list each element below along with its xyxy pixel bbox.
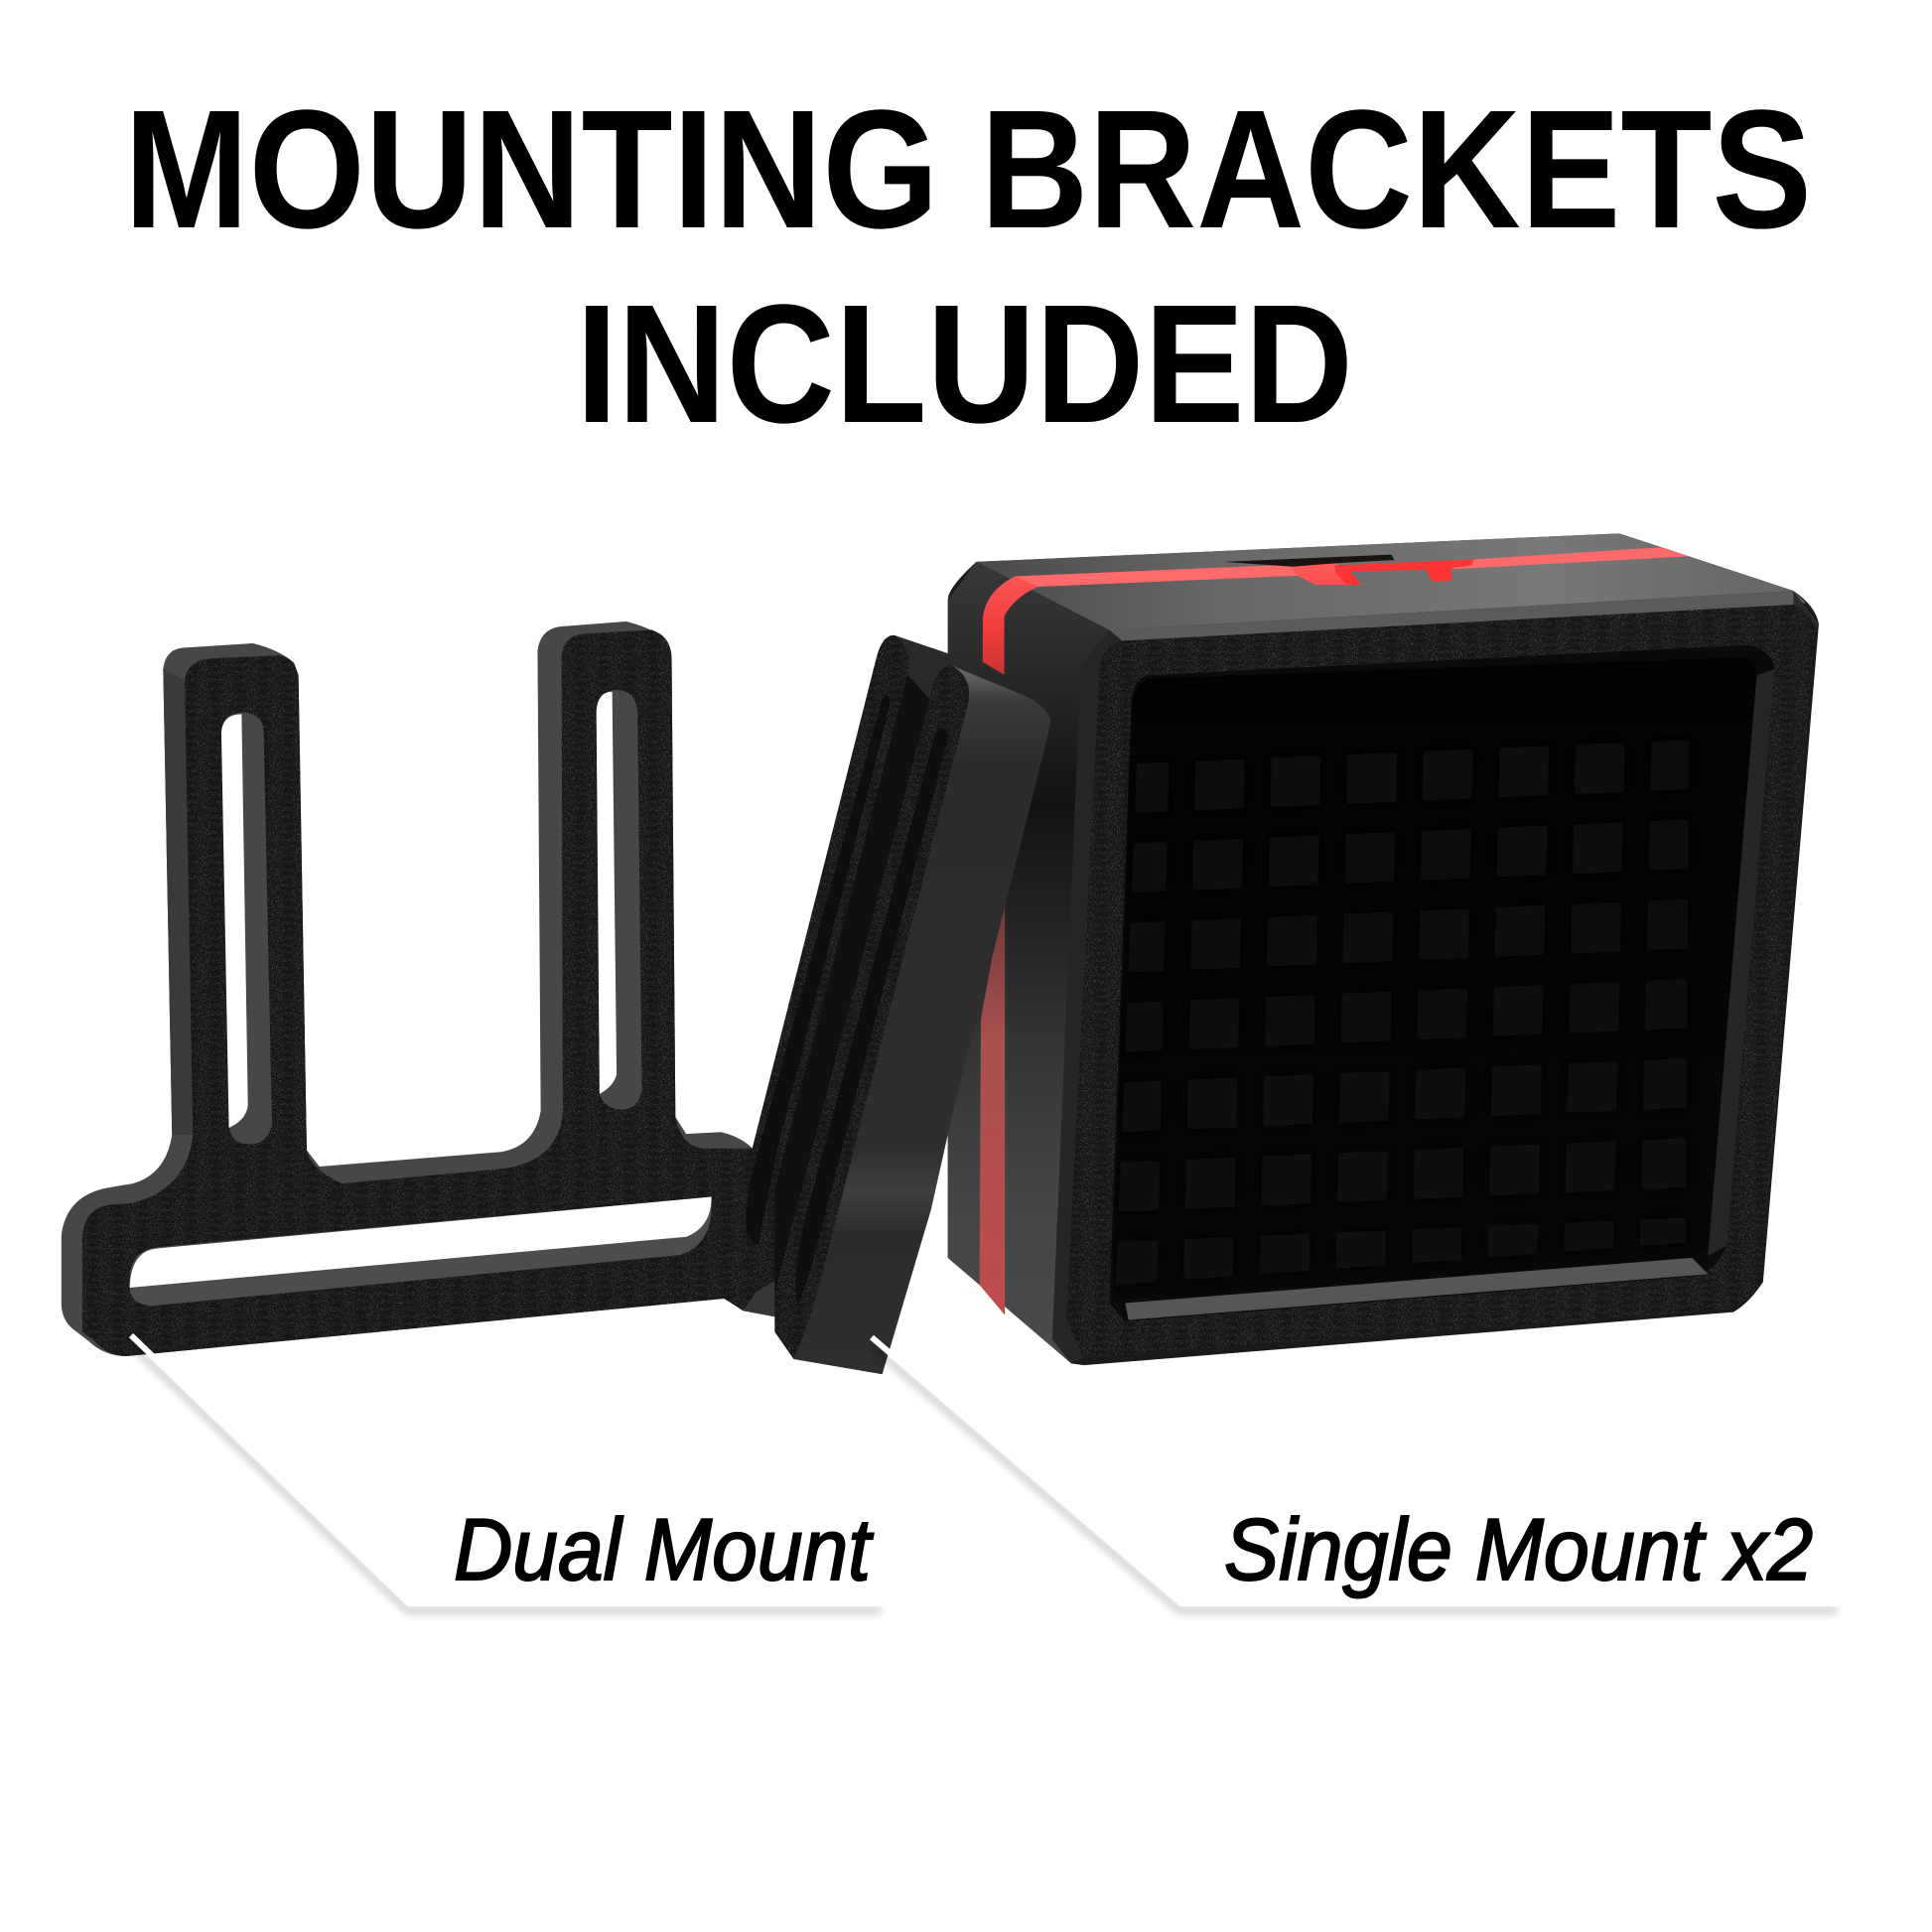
callout: Single Mount x2 bbox=[872, 1337, 1840, 1603]
leader line bbox=[872, 1337, 1840, 1603]
bracket front face bbox=[82, 630, 753, 1356]
slot 3 wall bbox=[130, 1197, 712, 1306]
product: cube light housing bbox=[948, 533, 1819, 1365]
front plate face bbox=[774, 666, 969, 1359]
slot 2 opening bbox=[597, 692, 617, 1094]
rear plate slot bbox=[746, 695, 891, 1244]
recess right wall bbox=[1708, 669, 1774, 1256]
top bevel bbox=[1109, 591, 1806, 641]
rear plate gap bbox=[774, 675, 929, 1293]
label: Dual Mount bbox=[454, 1500, 874, 1598]
recess bottom wall bbox=[1125, 1258, 1708, 1320]
slot 2 wall bbox=[597, 690, 642, 1110]
slot 3 opening bbox=[130, 1197, 712, 1288]
leader line bbox=[131, 1335, 884, 1603]
recess wall bbox=[1109, 645, 1774, 1321]
housing silhouette bbox=[948, 533, 1819, 1365]
title bbox=[124, 75, 1812, 459]
raised red clip bbox=[1335, 559, 1473, 585]
rear plate extrusion bbox=[743, 635, 987, 1322]
LED grid bbox=[1116, 718, 1689, 1285]
left bevel bbox=[1052, 630, 1122, 1363]
dual mount bracket bbox=[62, 621, 1051, 1374]
callout: Dual Mount bbox=[131, 1335, 884, 1603]
front plate slot bbox=[795, 728, 949, 1305]
title line 2: INCLUDED bbox=[576, 270, 1353, 459]
top slot bbox=[1223, 555, 1395, 567]
rear side plate bbox=[724, 635, 987, 1322]
red stripe right section bbox=[1451, 547, 1689, 569]
slot 1 opening bbox=[221, 714, 248, 1128]
red stripe top light section bbox=[1015, 565, 1298, 587]
rear plate foot bbox=[743, 1281, 774, 1316]
side face bbox=[948, 562, 1109, 1363]
top face bbox=[976, 533, 1793, 630]
bracket left shade bbox=[163, 669, 193, 1135]
bracket extrusion bbox=[62, 621, 753, 1356]
display screen bbox=[1113, 657, 1756, 1300]
red stripe side section bbox=[980, 887, 1005, 1315]
right corner bevel bbox=[1793, 591, 1819, 630]
front frame bbox=[1066, 605, 1816, 1357]
label: Single Mount x2 bbox=[1224, 1500, 1813, 1598]
red stripe top corner bbox=[983, 564, 1363, 675]
rear plate face bbox=[724, 635, 909, 1311]
front plate extrusion bbox=[793, 666, 1051, 1374]
front side plate bbox=[774, 666, 1051, 1374]
slot 1 wall bbox=[221, 713, 272, 1144]
